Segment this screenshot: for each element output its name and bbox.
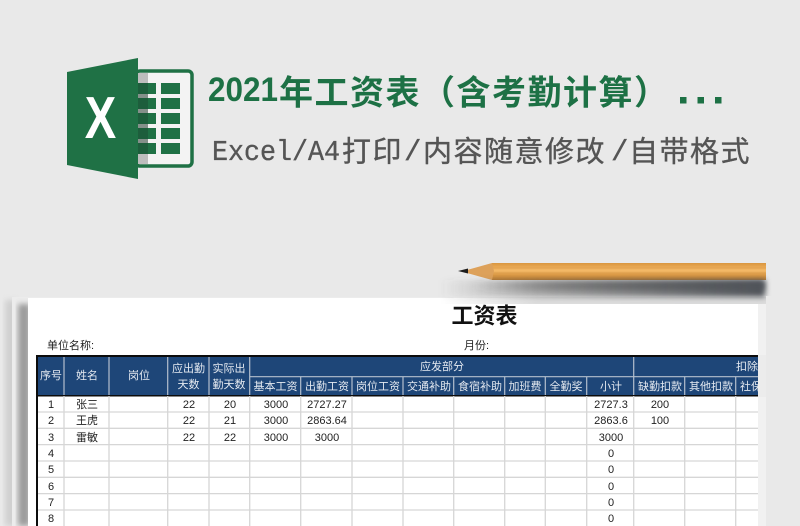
panel: pencil [458, 263, 766, 290]
table header: 全勤奖 [550, 379, 582, 393]
subtitle: 内容随意修改 [423, 136, 606, 168]
table rows: 22 [183, 415, 195, 427]
sheet title: 工资表 [451, 304, 518, 328]
table rows: 22 [183, 432, 195, 444]
table header: 加班费 [508, 380, 542, 393]
table rows: 3 [48, 432, 54, 444]
table rows: 雷敏 [76, 430, 98, 444]
table header: 基本工资 [254, 379, 298, 393]
table header: 勤天数 [212, 378, 246, 391]
table header: 社保 [740, 379, 762, 393]
table header: 交通补助 [407, 379, 451, 393]
title: 年工资表（含考勤计算） [279, 74, 670, 112]
table header: 天数 [178, 378, 200, 391]
table rows: 王虎 [76, 414, 98, 427]
table rows: 20 [224, 399, 236, 411]
table grid [38, 396, 758, 526]
table header: 岗位工资 [356, 379, 400, 393]
table header: 其他扣款 [689, 379, 733, 393]
subtitle: 自带格式 [629, 136, 751, 168]
table rows: 200 [651, 399, 669, 411]
table left border [36, 355, 38, 526]
table rows [48, 398, 669, 525]
table header: 应发部分 [420, 359, 464, 373]
table rows: 5 [48, 464, 54, 476]
table header: 缺勤扣款 [638, 379, 682, 393]
icon: excel logo [67, 58, 192, 179]
panel: spreadsheet paper [5, 280, 800, 526]
table rows: 0 [608, 481, 614, 493]
table header: 姓名 [76, 368, 98, 382]
table rows: 3000 [264, 415, 288, 427]
table rows: 张三 [76, 398, 98, 411]
table header: 实际出 [212, 361, 246, 375]
subtitle: / [404, 136, 421, 169]
table rows: 8 [48, 513, 54, 525]
table rows: 3000 [264, 399, 288, 411]
table header: 序号 [40, 368, 62, 382]
table rows: 1 [48, 399, 54, 411]
subtitle: 打印 [342, 136, 403, 168]
table rows: 3000 [599, 432, 623, 444]
table header [36, 355, 766, 397]
table rows: 3000 [315, 432, 339, 444]
table rows: 2727.3 [594, 399, 628, 411]
table rows: 2727.27 [307, 399, 347, 411]
table rows: 0 [608, 448, 614, 460]
icon: excel logo: X [85, 86, 117, 151]
subtitle [212, 136, 751, 169]
table rows: 21 [224, 415, 236, 427]
table rows: 7 [48, 497, 54, 509]
table header: 扣除 [736, 359, 758, 373]
table rows: 0 [608, 497, 614, 509]
table rows: 4 [48, 448, 54, 460]
table rows: 2 [48, 415, 54, 427]
table header: 小计 [600, 380, 622, 393]
table rows: 0 [608, 464, 614, 476]
table rows: 22 [183, 399, 195, 411]
table header: 岗位 [128, 368, 150, 382]
table rows: 2863.64 [307, 415, 347, 427]
subtitle: / [611, 136, 628, 169]
table header: 应出勤 [172, 361, 205, 375]
table rows: 100 [651, 415, 669, 427]
subtitle: Excel/A4 [212, 136, 340, 169]
table rows: 22 [224, 432, 236, 444]
title [208, 71, 722, 112]
unit label: 单位名称: [47, 338, 94, 352]
table rows: 3000 [264, 432, 288, 444]
table rows: 6 [48, 481, 54, 493]
title: 2021 [208, 71, 278, 109]
table rows: 2863.6 [594, 415, 628, 427]
table rows: 0 [608, 513, 614, 525]
month label: 月份: [464, 339, 489, 352]
table header: 食宿补助 [458, 379, 502, 393]
table header: 出勤工资 [305, 379, 349, 393]
